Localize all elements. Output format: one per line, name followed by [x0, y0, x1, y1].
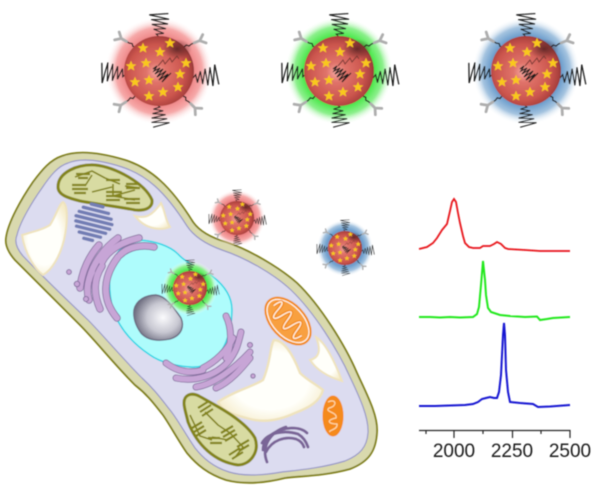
axis labels	[433, 441, 591, 462]
mitochondrion small	[322, 396, 344, 436]
chloroplast bottom	[184, 394, 256, 465]
nanoparticle: blue	[467, 13, 586, 127]
nucleus	[110, 240, 232, 367]
vacuole top	[135, 203, 170, 229]
golgi body: purple	[262, 427, 308, 462]
cytoplasm	[16, 160, 368, 475]
cell wall	[6, 153, 377, 483]
plant cell	[6, 153, 377, 483]
axis labels: 2000	[433, 441, 475, 462]
endoplasmic reticulum: upper	[80, 238, 154, 318]
spectra chart	[419, 199, 591, 462]
axis labels: 2250	[491, 441, 533, 462]
nanoparticle: small blue outside cell	[316, 220, 374, 276]
vacuole left	[22, 202, 67, 275]
vacuole small right	[310, 337, 342, 381]
x axis	[419, 430, 570, 438]
mitochondrion large	[256, 289, 320, 353]
vacuole large	[218, 340, 323, 421]
spectrum: blue	[419, 323, 570, 407]
axis labels: 2500	[549, 441, 591, 462]
nucleolus	[134, 295, 182, 340]
golgi body: blue	[71, 201, 116, 244]
spectrum: green	[419, 261, 570, 320]
nanoparticle: red	[100, 13, 219, 127]
nanoparticle: small green in nucleus	[161, 260, 219, 316]
nanoparticle: small red outside cell	[208, 190, 266, 246]
vesicles	[67, 270, 255, 378]
chloroplast top	[58, 165, 152, 210]
spectrum: red	[419, 199, 570, 251]
nanoparticle: green	[280, 13, 399, 127]
endoplasmic reticulum: lower	[166, 316, 250, 388]
